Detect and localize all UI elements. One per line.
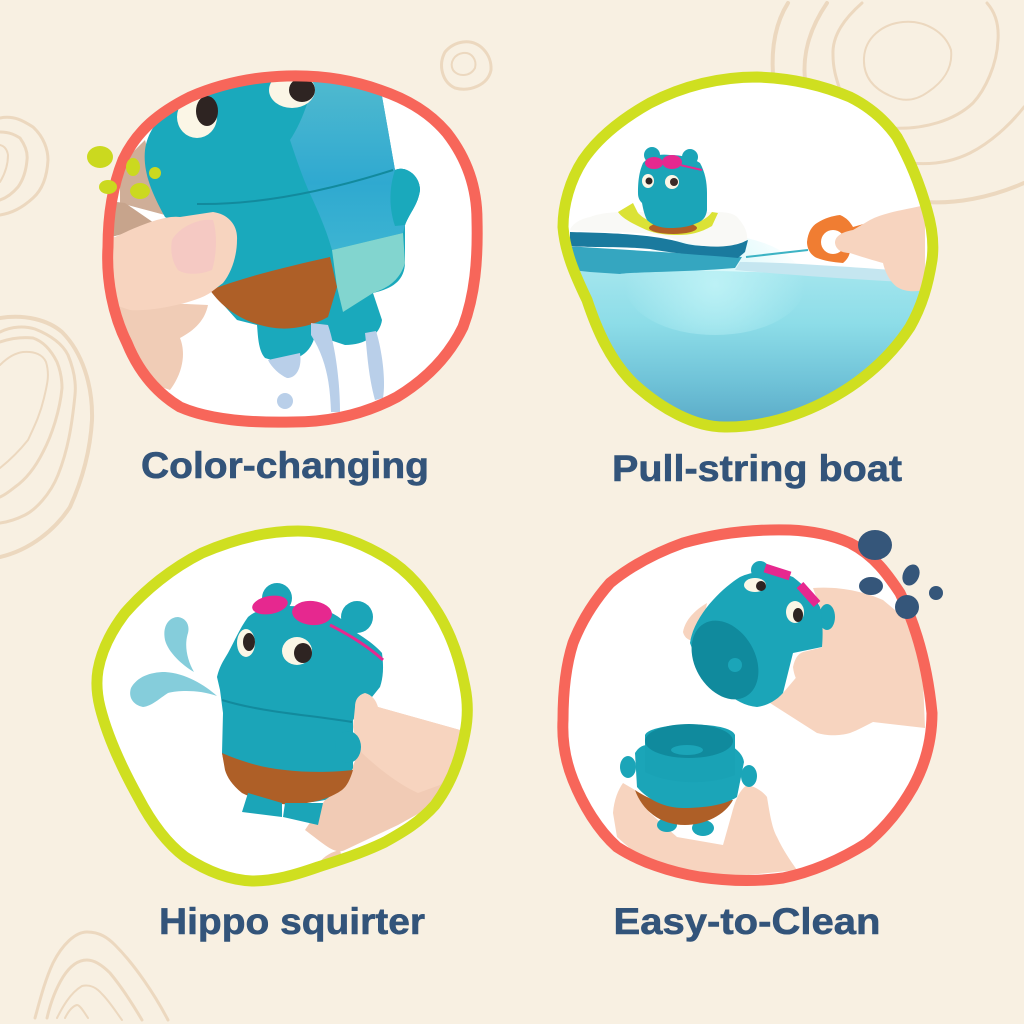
label: easy-to-clean: Easy-to-Clean (614, 901, 880, 942)
thumb (793, 648, 822, 678)
boat deck (570, 212, 747, 247)
goggles (330, 625, 383, 660)
icon: green splash dots (87, 146, 161, 199)
hippo lower half (657, 820, 677, 832)
eyes (237, 629, 255, 657)
hippo body (217, 606, 383, 803)
ears (751, 561, 767, 574)
hippo: color-changing body (145, 70, 420, 361)
panel: color-changing (87, 70, 477, 422)
hand behind hippo (120, 140, 165, 215)
hand upper (770, 588, 925, 735)
brown bottom (210, 257, 337, 329)
icon: water squirt (130, 617, 217, 707)
hand lower (613, 783, 797, 880)
thumb (353, 693, 460, 793)
panel: pull-string boat (555, 77, 935, 440)
hand (835, 205, 925, 291)
hippo ears (262, 583, 292, 606)
label: pull-string boat: Pull-string boat (612, 448, 902, 489)
submerged hull (565, 246, 742, 274)
arm (353, 732, 361, 762)
water (580, 270, 920, 422)
label: hippo squirter: Hippo squirter (159, 901, 425, 942)
water streams (268, 323, 384, 412)
eyes (744, 578, 766, 592)
panel: easy-to-clean (563, 530, 943, 881)
icon: navy splash dots (858, 530, 943, 619)
thumb (100, 212, 237, 310)
label: color-changing: Color-changing (141, 445, 429, 486)
boat hull (570, 232, 748, 258)
pull string (746, 250, 808, 257)
lower fingers (305, 707, 460, 851)
orange ring (807, 215, 867, 263)
muzzle seam (222, 700, 352, 722)
goggles (765, 568, 817, 604)
brown bottom (222, 753, 353, 804)
hippo top half (690, 572, 823, 707)
finger behind hippo (683, 603, 707, 641)
panel: hippo squirter (97, 531, 467, 881)
eyes (177, 96, 217, 138)
hippo on boat (644, 147, 660, 160)
brown base (649, 224, 697, 234)
feet (242, 793, 282, 817)
yellow collar (618, 203, 718, 235)
